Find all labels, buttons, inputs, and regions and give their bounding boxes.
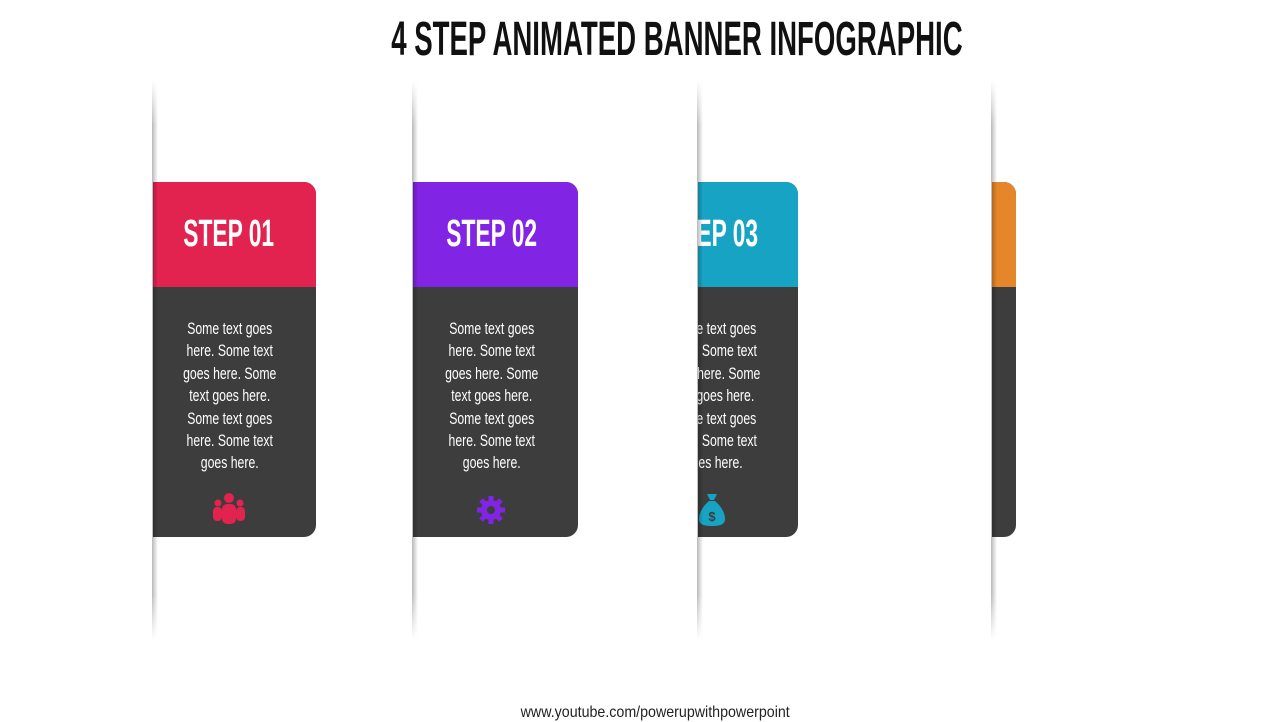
icon: people [213, 493, 245, 524]
text 2: goes here. Some [445, 364, 538, 383]
text 1: here. Some text [186, 431, 273, 450]
title: 4 STEP ANIMATED BANNER INFOGRAPHIC [391, 13, 963, 66]
header 1: STEP 01 [183, 213, 274, 255]
footer url: www.youtube.com/powerupwithpowerpoint [520, 704, 790, 721]
icon: gear [477, 496, 505, 524]
text 2: goes here. [463, 453, 520, 472]
text 2: Some text goes [449, 409, 534, 428]
text 3 [698, 319, 760, 472]
header 2: STEP 02 [446, 213, 537, 255]
text 2: here. Some text [448, 431, 535, 450]
header 1 [141, 182, 316, 287]
text 2: here. Some text [448, 341, 535, 360]
icon: money bag: $ [708, 509, 716, 524]
text 1 [183, 319, 276, 472]
text 1: Some text goes [187, 409, 272, 428]
text 2: Some text goes [449, 319, 534, 338]
header 4 [851, 182, 1016, 287]
text 1: goes here. [201, 453, 258, 472]
card 3 [698, 182, 798, 537]
card 2 [413, 182, 578, 537]
text 1: text goes here. [189, 386, 270, 405]
card 4 [992, 182, 1016, 537]
header 3 [633, 182, 798, 287]
icon: money bag [699, 494, 725, 526]
text 1: here. Some text [186, 341, 273, 360]
card 1 [153, 182, 316, 537]
text 2: text goes here. [451, 386, 532, 405]
text 1: Some text goes [187, 319, 272, 338]
header 2 [413, 182, 578, 287]
text 2 [445, 319, 538, 472]
text 1: goes here. Some [183, 364, 276, 383]
